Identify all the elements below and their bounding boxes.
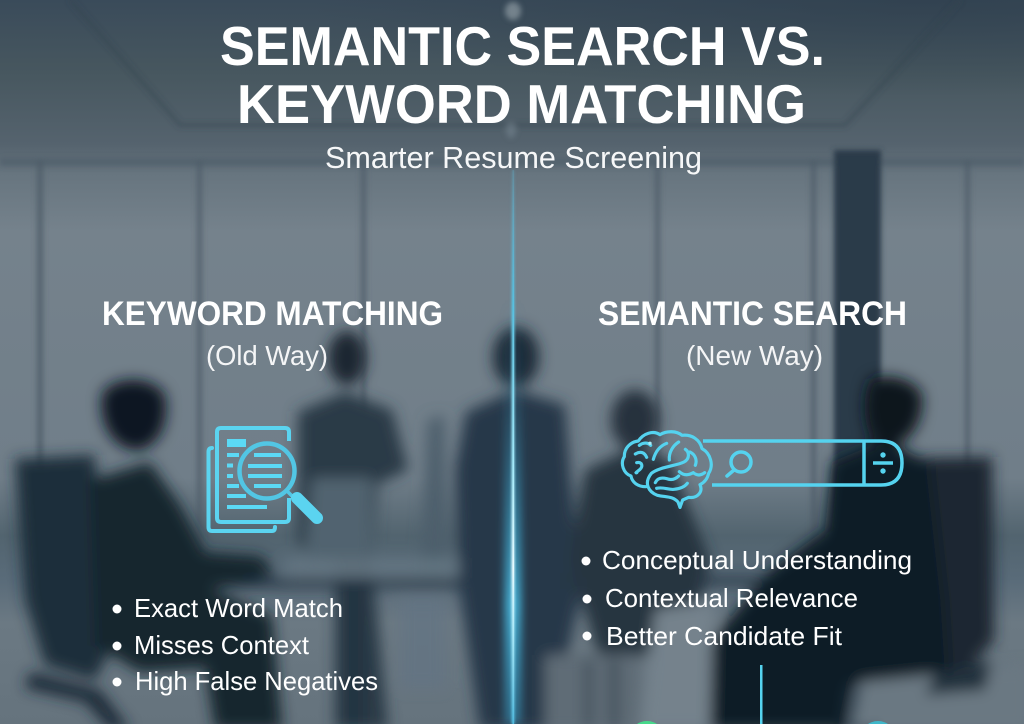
- green indicator circle: [630, 721, 664, 724]
- icon: brain: [622, 432, 711, 507]
- bullet list: keyword matching: Exact Word Match: [134, 593, 343, 623]
- center divider glow: [505, 300, 521, 724]
- subheading: old way: (Old Way): [206, 340, 328, 371]
- bullet list: keyword matching: High False Negatives: [135, 666, 378, 696]
- person 2: [328, 331, 366, 385]
- lower left chair base: [25, 672, 130, 724]
- panel: keyword matching: [102, 295, 443, 696]
- heading: semantic search: SEMANTIC SEARCH: [598, 295, 907, 333]
- bullet list: semantic search: [582, 545, 912, 651]
- title: [220, 15, 825, 135]
- connector line: [760, 665, 762, 724]
- person 4: [611, 390, 659, 450]
- teal indicator circle: [861, 721, 895, 724]
- left chair: [15, 455, 110, 680]
- bullet list: semantic search: Conceptual Understanding: [602, 545, 912, 575]
- title: KEYWORD MATCHING: [237, 73, 806, 135]
- bullet list: semantic search: Better Candidate Fit: [606, 621, 843, 651]
- bullet list: semantic search: Contextual Relevance: [605, 583, 858, 613]
- subheading: new way: (New Way): [686, 340, 823, 371]
- monitor: [420, 415, 448, 575]
- bullet list: keyword matching: [112, 593, 378, 696]
- bullet list: keyword matching: Misses Context: [134, 630, 310, 660]
- icon: search bar: [703, 441, 902, 485]
- left person: [101, 380, 166, 450]
- table: [285, 558, 512, 578]
- heading: keyword matching: KEYWORD MATCHING: [102, 295, 443, 333]
- subtitle: Smarter Resume Screening: [325, 140, 702, 175]
- icon: document with magnifying glass: [208, 428, 317, 531]
- center person: [493, 327, 539, 387]
- right person + chair: [905, 457, 994, 680]
- title: SEMANTIC SEARCH VS.: [220, 15, 825, 77]
- panel: semantic search: [582, 295, 912, 724]
